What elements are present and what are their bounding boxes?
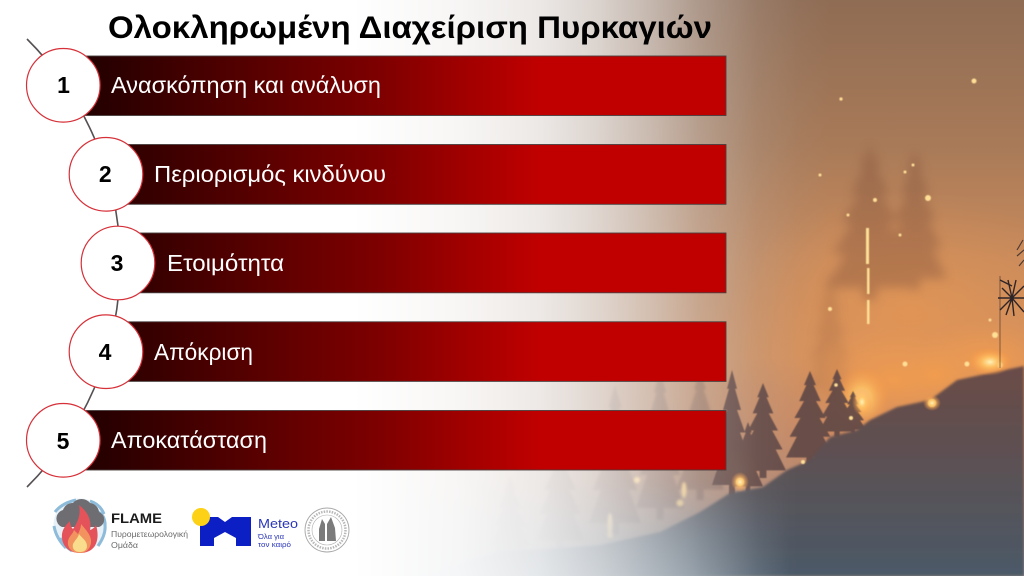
number 1: 1: [57, 72, 70, 98]
icon: blue M: [200, 517, 251, 546]
bar 5: [80, 410, 726, 470]
FLAME subtitle line 2: Ομάδα: [111, 540, 138, 550]
Meteo slogan line 1: Όλα για: [257, 532, 285, 541]
Meteo wordmark: Meteo: [258, 516, 298, 531]
logo: FLAME: [54, 498, 188, 553]
step 2: risk reduction: [69, 138, 726, 211]
circle 2: [69, 138, 143, 211]
bar 4: [122, 322, 726, 381]
number 3: 3: [111, 250, 123, 276]
logo: Meteo: [192, 508, 298, 549]
FLAME wordmark: FLAME: [111, 510, 162, 526]
bar 1: [80, 56, 726, 116]
bar 2: [122, 144, 726, 204]
connecting arc: [27, 39, 120, 487]
icon: flame and cloud: [54, 498, 106, 553]
label 3: Ετοιμότητα: [167, 250, 284, 276]
label 2: Περιορισμός κινδύνου: [154, 161, 386, 187]
label 5: Αποκατάσταση: [111, 427, 267, 453]
step 4: response: [69, 315, 726, 389]
circle 3: [81, 226, 155, 300]
Meteo slogan line 2: τον καιρό: [258, 540, 291, 549]
number 5: 5: [57, 428, 70, 454]
background wildfire scene: [437, 0, 1024, 576]
title: Ολοκληρωμένη Διαχείριση Πυρκαγιών: [108, 9, 712, 45]
step 5: recovery: [26, 404, 726, 477]
FLAME subtitle line 1: Πυρομετεωρολογική: [111, 529, 188, 539]
logo: university seal: [305, 508, 349, 552]
step 3: preparedness: [81, 226, 726, 300]
number 2: 2: [99, 161, 112, 187]
label 1: Ανασκόπηση και ανάλυση: [111, 72, 381, 98]
icon: yellow sun: [192, 508, 210, 526]
circle 5: [26, 404, 100, 477]
label 4: Απόκριση: [154, 339, 253, 365]
circle 4: [69, 315, 143, 389]
circle 1: [26, 49, 100, 122]
bar 3: [135, 233, 726, 293]
step 1: review and analysis: [26, 49, 726, 122]
number 4: 4: [99, 339, 112, 365]
